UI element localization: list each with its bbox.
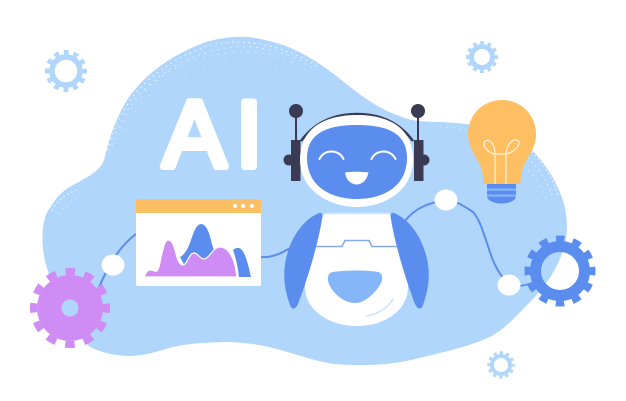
window header: [136, 199, 261, 213]
icon: purple gear: [34, 272, 106, 344]
robot head: [300, 115, 413, 207]
icon: small gear top right: [468, 43, 496, 71]
area chart: [143, 224, 251, 278]
robot right arm: [391, 213, 429, 309]
icon: light bulb: [468, 100, 536, 204]
window dots: [233, 204, 254, 208]
title: AI: I: [236, 82, 262, 186]
robot: [284, 104, 430, 326]
robot body: [305, 213, 408, 326]
bulb base: [487, 184, 516, 204]
robot left arm: [284, 213, 322, 309]
robot mouth: [345, 172, 368, 184]
background blob: [42, 37, 567, 365]
speckle texture: [52, 42, 559, 218]
connector lines: [98, 200, 532, 290]
robot headband: [301, 114, 413, 141]
bulb glass: [468, 100, 536, 184]
bulb filament: [484, 140, 519, 184]
title: AI: [163, 82, 262, 186]
robot belly: [328, 270, 382, 303]
panel: chart window: [136, 199, 261, 286]
robot eyes: [320, 152, 396, 159]
robot face: [307, 125, 407, 199]
connector nodes: [102, 190, 520, 296]
robot chest line: [315, 240, 397, 246]
icon: small gear bottom right: [489, 353, 513, 377]
robot gloss: [367, 299, 393, 316]
robot body top line: [325, 212, 390, 214]
robot antennas: [284, 104, 430, 181]
icon: blue gear: [528, 239, 592, 303]
title: AI: A: [163, 82, 226, 186]
icon: small gear top left: [48, 52, 84, 90]
